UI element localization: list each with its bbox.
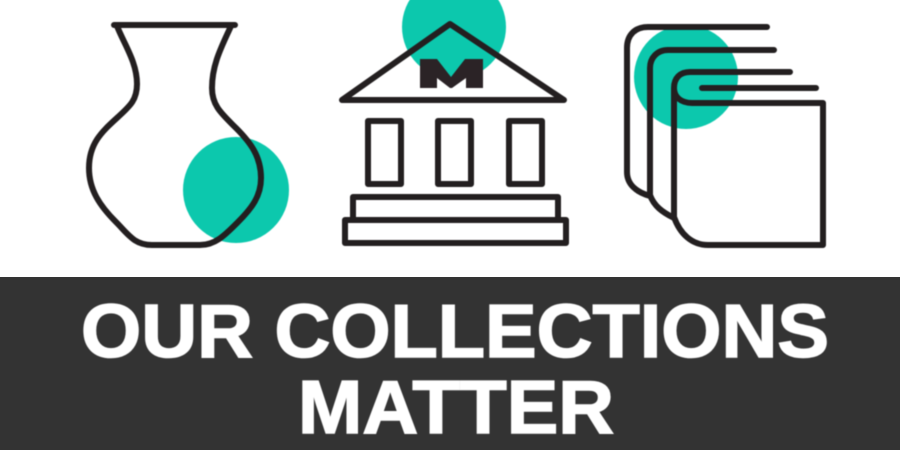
museum roof <box>342 24 564 100</box>
museum M emblem <box>420 59 483 88</box>
title line 1: OUR COLLECTIONS <box>81 289 829 373</box>
museum columns <box>368 121 542 184</box>
icon: stack of books with teal circle <box>627 25 823 245</box>
icon: vase with teal circle <box>89 25 289 245</box>
banner: dark title band <box>0 277 900 450</box>
museum steps <box>345 197 566 243</box>
title line 2: MATTER <box>298 365 614 449</box>
icon: museum building with teal circle <box>342 0 566 243</box>
